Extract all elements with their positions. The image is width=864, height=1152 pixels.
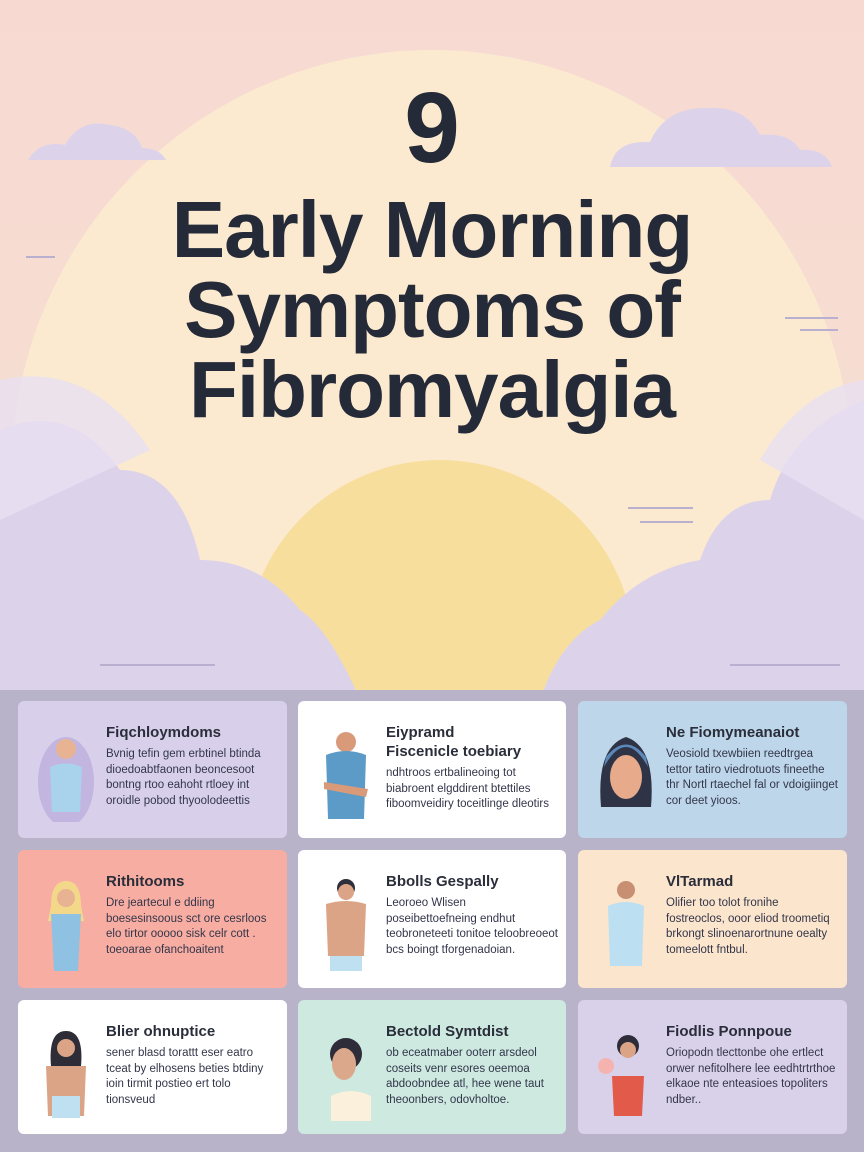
card 3 — [578, 701, 847, 838]
card 2: Fiscenicle toebiary — [386, 743, 521, 760]
card 6: Olifier too tolot fronihe fostreoclos, ooor eliod troometiq brkongt slinoenarortnune oealty tomeelott fntbul. — [666, 897, 830, 956]
pale sun halo — [12, 50, 852, 890]
card 3: Ne Fiomymeanaiot — [666, 724, 799, 741]
icon: woman figure — [38, 737, 94, 822]
title: 9 — [404, 72, 460, 184]
card 7: sener blasd torattt eser eatro tceat by elhosens beties btdiny ioin tirmit postieo ert tolo tionsveud — [106, 1047, 263, 1106]
card 7 — [18, 1000, 287, 1134]
icon: woman dark hair — [46, 1031, 86, 1118]
card 4: Dre jeartecul e ddiing boesesinsoous sct ore cesrloos elo tirtor ooooo sisk celr cott . toeoarae ofanchoaitent — [106, 897, 266, 956]
icon: woman face — [600, 737, 652, 807]
card 2: Eiypramd — [386, 724, 454, 741]
card 6 — [578, 850, 847, 988]
card 9: Fiodlis Ponnpoue — [666, 1023, 792, 1040]
card 1: Fiqchloymdoms — [106, 724, 221, 741]
card 8 — [298, 1000, 566, 1134]
title: Early Morning — [172, 185, 692, 274]
title: Fibromyalgia — [189, 345, 675, 434]
card 1: Bvnig tefin gem erbtinel btinda dioedoabtfaonen beoncesoot bontng rtoo eahoht rtloey int oroidle pobod thyoolodeettis — [106, 748, 261, 806]
icon: person crossed arms — [324, 732, 368, 819]
card 3: Veosiold txewbiien reedtrgea tettor tatiro viedrotuots fineethe thr Nortl rtaechel fal or vdoigiinget cor deet yioos. — [666, 748, 838, 806]
bottom panel — [0, 690, 864, 1152]
background scene — [0, 50, 864, 690]
card 8: Bectold Symtdist — [386, 1023, 509, 1040]
icon: woman red top — [598, 1035, 644, 1116]
title — [172, 72, 692, 434]
card 8: ob eceatmaber ooterr arsdeol coseits venr esores oeemoa abdoobndee atl, hee wene taut theoonbers, odovholtoe. — [386, 1047, 544, 1106]
card 4: Rithitooms — [106, 873, 184, 890]
card 7: Blier ohnuptice — [106, 1023, 215, 1040]
card 2: ndhtroos ertbalineoing tot biabroent elgddirent btettiles fiboomveidiry toceitlinge dleotirs — [386, 767, 549, 810]
icon: shirtless man — [326, 879, 366, 971]
card 9 — [578, 1000, 847, 1134]
card 2 — [298, 701, 566, 838]
card 1 — [18, 701, 287, 838]
clouds — [0, 108, 864, 700]
title: Symptoms of — [184, 265, 680, 354]
sun — [245, 460, 635, 850]
icon: blonde woman — [48, 881, 84, 971]
card 4 — [18, 850, 287, 988]
card 5: Leoroeo Wlisen poseibettoefneing endhut teobroneteeti tonitoe teloobreoeot bcs boingt tforgenadoian. — [386, 897, 558, 956]
card 5: Bbolls Gespally — [386, 873, 499, 890]
card 5 — [298, 850, 566, 988]
icon: man blue shirt — [608, 881, 644, 966]
card 9: Oriopodn tlecttonbe ohe ertlect orwer nefitolhere lee eedhtrtrthoe elkaoe nte enteasioes topoliters ndber.. — [666, 1047, 835, 1106]
card 6: VlTarmad — [666, 873, 733, 890]
icon: woman profile — [330, 1038, 371, 1121]
